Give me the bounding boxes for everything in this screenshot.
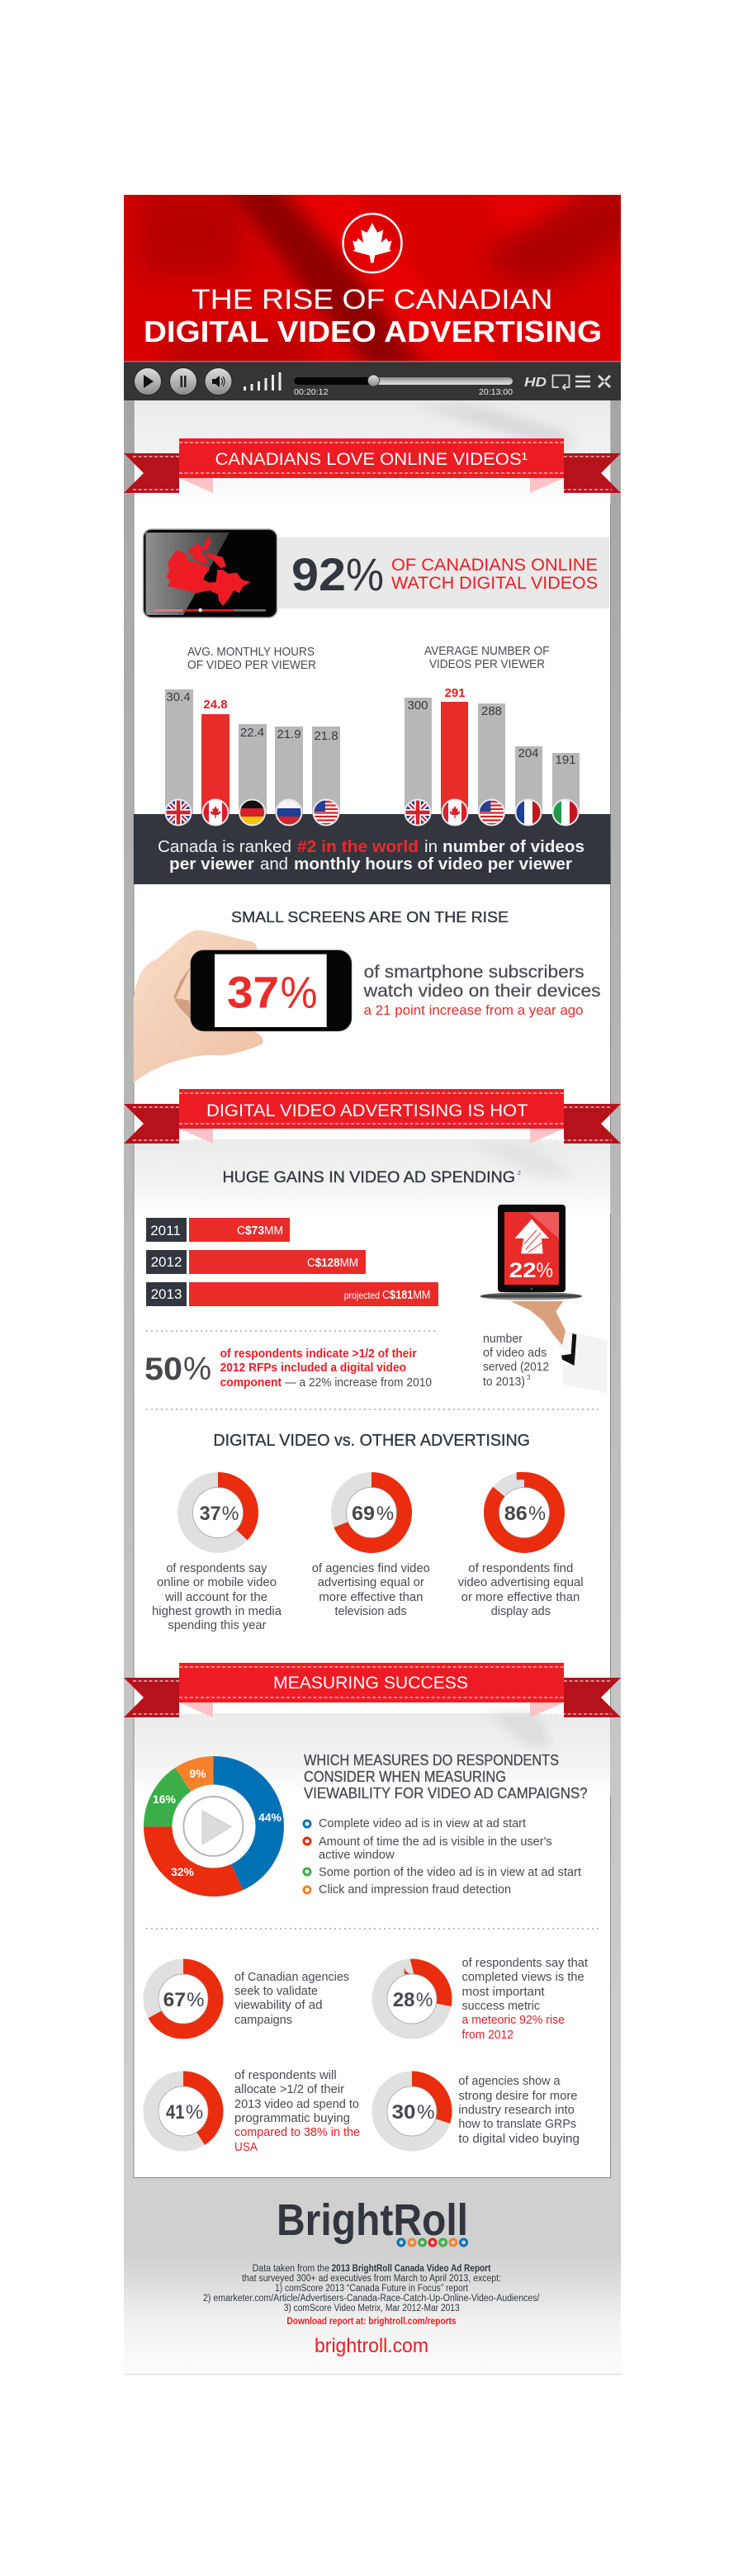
bar chart: monthly hours: 30.4 (166, 690, 191, 704)
donut: 30 percent (380, 2079, 444, 2143)
icon: map of Canada (167, 535, 250, 606)
ribbon: measuring success (124, 1663, 621, 1717)
donut: 41 percent: 41 (166, 2101, 185, 2124)
caption: 86 percent: or more effective than (461, 1591, 580, 1604)
text: 28 percent (462, 1957, 588, 2042)
caption: 86 percent: display ads (491, 1605, 551, 1618)
icon: volume button (205, 368, 232, 395)
callout: 50 percent (144, 1347, 432, 1390)
icon: maple leaf in circle (343, 214, 401, 272)
icon: hand holding phone (134, 930, 352, 1083)
icon: play button (134, 368, 162, 395)
donut: 67 percent: 67 (163, 1989, 186, 2011)
ribbon: measuring success: MEASURING SUCCESS (273, 1673, 468, 1693)
download link: Download report at: brightroll.com/reports (286, 2317, 457, 2327)
fabric texture: section 1 (134, 400, 611, 504)
bar chart: videos per viewer: 204 (518, 746, 539, 760)
callout band: Canada ranked #2 (134, 814, 611, 884)
callout band: Canada ranked #2: number of videos (442, 838, 584, 856)
legend (304, 1817, 581, 1896)
ribbon: Canadians love online videos: CANADIANS LOVE ONLINE VIDEOS¹ (215, 449, 528, 469)
donut: 30 percent: % (417, 2101, 434, 2124)
donut: 86 percent: % (528, 1503, 546, 1525)
text: 28 percent: most important (462, 1986, 545, 1999)
donut: 37 percent: % (222, 1503, 239, 1525)
bar chart: videos per viewer (405, 686, 580, 814)
callout: 92 percent: 92 (291, 548, 346, 600)
text: 28 percent: success metric (462, 2000, 540, 2013)
bar chart: video ad spending: 2011 (150, 1223, 181, 1238)
title: THE RISE OF CANADIAN (192, 284, 553, 315)
donut: 86 percent (491, 1480, 557, 1546)
bar chart: monthly hours: 21.8 (314, 729, 338, 743)
text: number of video ads served: of video ads (483, 1347, 547, 1360)
heading: videos per viewer chart (424, 645, 550, 671)
bar chart: monthly hours: 21.9 (277, 727, 301, 741)
donut: 30 percent: 30 (392, 2101, 415, 2124)
player controls (524, 375, 610, 390)
fabric texture: section 2 (134, 1139, 611, 1214)
bar chart: videos per viewer: 288 (481, 704, 502, 718)
legend: Complete video ad is in view at ad start (319, 1817, 526, 1830)
footer sources: that surveyed 300+ ad executives from March to April 2013, except: (242, 2274, 501, 2284)
heading: videos per viewer chart: VIDEOS PER VIEWER (429, 658, 545, 671)
text: 28 percent: of respondents say that (462, 1957, 588, 1970)
caption: 86 percent (458, 1562, 584, 1618)
bar chart: videos per viewer: 291 (444, 686, 466, 700)
icon: up arrow (514, 1219, 549, 1253)
donut: 67 percent (151, 1967, 215, 2031)
heading: digital video vs other advertising: DIGITAL VIDEO vs. OTHER ADVERTISING (213, 1432, 530, 1450)
heading: which measures (304, 1752, 588, 1802)
callout band: Canada ranked #2: and (260, 855, 288, 874)
donut chart: viewability measures: 44% (258, 1811, 282, 1824)
legend: active window (319, 1849, 395, 1862)
callout band: Canada ranked #2: monthly hours of video per viewer (294, 855, 572, 874)
text: 30 percent: strong desire for more (458, 2090, 578, 2103)
caption: 86 percent: video advertising equal (458, 1576, 584, 1589)
legend: Click and impression fraud detection (319, 1883, 511, 1896)
text: 67 percent (234, 1971, 349, 2027)
callout: 92 percent: WATCH DIGITAL VIDEOS (391, 574, 598, 593)
video player bar (124, 361, 621, 400)
donut: 69 percent: 69 (352, 1503, 375, 1525)
text: 28 percent: completed views is the (462, 1971, 584, 1984)
caption: 37 percent: of respondents say (166, 1562, 267, 1575)
text: number of video ads served: 3 (527, 1374, 531, 1381)
text: number of video ads served: served (2012 (483, 1361, 549, 1374)
caption: 37 percent: spending this year (168, 1619, 267, 1632)
callout: 92 percent: % (346, 548, 384, 600)
caption: 37 percent (152, 1562, 282, 1632)
ribbon: digital video advertising is hot (124, 1089, 621, 1144)
bar chart: videos per viewer: 300 (407, 698, 428, 713)
text: smartphone subscribers: a 21 point increase from a year ago (364, 1002, 584, 1018)
footer sources: 2013 BrightRoll Canada Video Ad Report (332, 2264, 491, 2274)
caption: 86 percent: of respondents find (468, 1562, 573, 1575)
legend: Some portion of the video ad is in view at ad start (319, 1866, 581, 1879)
callout band: Canada ranked #2: #2 in the world (297, 838, 419, 856)
bar chart: video ad spending: C$181MM (382, 1288, 431, 1302)
donut: 41 percent: % (186, 2101, 203, 2124)
bar chart: videos per viewer: 191 (555, 753, 576, 767)
text: 41 percent: programmatic buying (234, 2112, 350, 2125)
heading: monthly hours chart: AVG. MONTHLY HOURS (187, 646, 315, 659)
caption: 69 percent: television ads (335, 1605, 406, 1618)
donut: 41 percent (151, 2079, 215, 2143)
device with Canada map (144, 529, 277, 618)
card frame (124, 400, 621, 2375)
callout: 50 percent: — a 22% increase from 2010 (285, 1376, 432, 1390)
text: 41 percent: compared to 38% in the (234, 2126, 360, 2139)
progress bar (294, 375, 513, 397)
text: 30 percent: industry research into (458, 2104, 575, 2117)
heading: huge gains: HUGE GAINS IN VIDEO AD SPENDING (223, 1168, 515, 1186)
donut: 28 percent (380, 1967, 444, 2031)
icon: waiter hand with tablet on tray (480, 1205, 608, 1393)
caption: 69 percent: more effective than (319, 1591, 423, 1604)
footer sources: 1) comScore 2013 “Canada Future in Focus” report (275, 2284, 469, 2294)
donut: 86 percent: 86 (504, 1503, 528, 1525)
bar chart: video ad spending: C$128MM (307, 1256, 358, 1270)
caption: 69 percent: advertising equal or (318, 1576, 424, 1589)
fabric texture: section 3 (134, 1713, 611, 1796)
donut: 37 percent: 37 (200, 1503, 221, 1525)
progress bar: 20:13:00 (479, 387, 513, 397)
icon: waiter hand with tablet on tray: % (537, 1259, 553, 1282)
callout band: Canada ranked #2: in (424, 838, 438, 856)
donut: 67 percent: % (187, 1989, 205, 2011)
donut: 37 percent (185, 1480, 251, 1546)
donut chart: viewability measures (153, 1767, 282, 1882)
text: 30 percent: of agencies show a (458, 2075, 561, 2088)
text: 30 percent (458, 2075, 580, 2146)
text: 41 percent: 2013 video ad spend to (234, 2098, 359, 2111)
footer sources: Data taken from the (253, 2264, 329, 2274)
title: DIGITAL VIDEO ADVERTISING (144, 315, 602, 348)
heading: which measures: CONSIDER WHEN MEASURING (304, 1769, 506, 1785)
callout band: Canada ranked #2: per viewer (169, 855, 254, 874)
icon: pause button (170, 368, 196, 395)
heading: videos per viewer chart: AVERAGE NUMBER OF (424, 645, 550, 658)
text: number of video ads served: to 2013) (483, 1376, 525, 1389)
donut chart: viewability measures: 9% (189, 1767, 206, 1780)
donut: 69 percent (338, 1480, 405, 1546)
caption: 37 percent: highest growth in media (152, 1605, 282, 1618)
caption: 37 percent: will account for the (164, 1591, 267, 1604)
text: 67 percent: of Canadian agencies (234, 1971, 349, 1984)
icon: waiter hand with tablet on tray: 22 (509, 1259, 537, 1282)
heading: which measures: WHICH MEASURES DO RESPONDENTS (304, 1752, 559, 1769)
title (144, 284, 602, 348)
ribbon: digital video advertising is hot: DIGITAL VIDEO ADVERTISING IS HOT (206, 1101, 528, 1120)
text: 41 percent: of respondents will (234, 2069, 337, 2082)
header banner (124, 195, 621, 361)
icon: hand holding phone: 37 (227, 968, 279, 1017)
callout: 50 percent: 50 (144, 1352, 182, 1387)
bar chart: monthly hours (165, 689, 340, 814)
text: 28 percent: from 2012 (462, 2029, 513, 2042)
donut: 28 percent: % (416, 1989, 433, 2011)
bar chart: video ad spending (146, 1218, 438, 1306)
text: smartphone subscribers: watch video on their devices (363, 982, 601, 1001)
callout band: Canada ranked #2: Canada is ranked (158, 838, 291, 856)
caption: 69 percent (312, 1562, 430, 1618)
text: 28 percent: a meteoric 92% rise (462, 2014, 565, 2027)
callout: 50 percent: % (183, 1352, 211, 1387)
icon: hand holding phone: % (281, 968, 317, 1017)
bar chart: video ad spending: C$73MM (237, 1224, 283, 1238)
player controls: HD (524, 376, 547, 390)
heading: monthly hours chart: OF VIDEO PER VIEWER (187, 659, 316, 672)
text: 41 percent (234, 2069, 360, 2154)
bar chart: video ad spending: projected (344, 1290, 380, 1301)
callout: 50 percent: 2012 RFPs included a digital video (220, 1361, 406, 1375)
text: 67 percent: seek to validate (234, 1985, 318, 1998)
bar chart: monthly hours: 22.4 (240, 726, 264, 740)
text: 67 percent: campaigns (234, 2014, 292, 2027)
ribbon: Canadians love online videos (124, 438, 621, 493)
icon: play button (183, 1797, 243, 1856)
bar chart: video ad spending: 2013 (151, 1286, 182, 1302)
heading: small screens: SMALL SCREENS ARE ON THE RISE (231, 908, 509, 926)
footer sources (203, 2264, 540, 2313)
text: smartphone subscribers (363, 963, 601, 1018)
heading: which measures: VIEWABILITY FOR VIDEO AD CAMPAIGNS? (304, 1785, 588, 1802)
heading: huge gains: 2 (518, 1171, 521, 1177)
callout: 50 percent: of respondents indicate >1/2 of their (220, 1347, 417, 1361)
bar chart: monthly hours: 24.8 (203, 698, 228, 712)
donut chart: viewability measures: 16% (153, 1792, 177, 1806)
callout: 92 percent: OF CANADIANS ONLINE (391, 556, 598, 575)
text: 30 percent: to digital video buying (458, 2133, 580, 2146)
text: 41 percent: USA (234, 2141, 258, 2154)
caption: 37 percent: online or mobile video (157, 1576, 277, 1589)
icon: signal bars (244, 372, 281, 391)
text: smartphone subscribers: of smartphone subscribers (364, 963, 584, 982)
donut: 69 percent: % (376, 1503, 394, 1525)
donut chart: viewability measures: 32% (171, 1865, 195, 1878)
heading: monthly hours chart (187, 646, 316, 672)
legend: Amount of time the ad is visible in the user's (319, 1835, 552, 1849)
country flags (165, 799, 579, 826)
footer sources: 3) comScore Video Metrix, Mar 2012-Mar 2013 (284, 2304, 460, 2313)
donut: 28 percent: 28 (393, 1989, 414, 2011)
progress bar: 00:20:12 (294, 387, 329, 397)
logo: BrightRoll: BrightRoll (277, 2195, 468, 2245)
bar chart: video ad spending: 2012 (151, 1254, 182, 1270)
text: 41 percent: allocate >1/2 of their (234, 2083, 344, 2096)
callout: 50 percent: component (220, 1376, 282, 1390)
text: number of video ads served: number (483, 1333, 523, 1346)
website: brightroll.com (315, 2335, 428, 2357)
caption: 69 percent: of agencies find video (312, 1562, 430, 1575)
text: number of video ads served (483, 1333, 549, 1389)
text: 30 percent: how to translate GRPs (458, 2118, 576, 2131)
callout: 92 percent (277, 537, 609, 608)
text: 67 percent: viewability of ad (234, 1999, 322, 2012)
footer sources: 2) emarketer.com/Article/Advertisers-Canada-Race-Catch-Up-Online-Video-Audiences/ (203, 2294, 540, 2304)
